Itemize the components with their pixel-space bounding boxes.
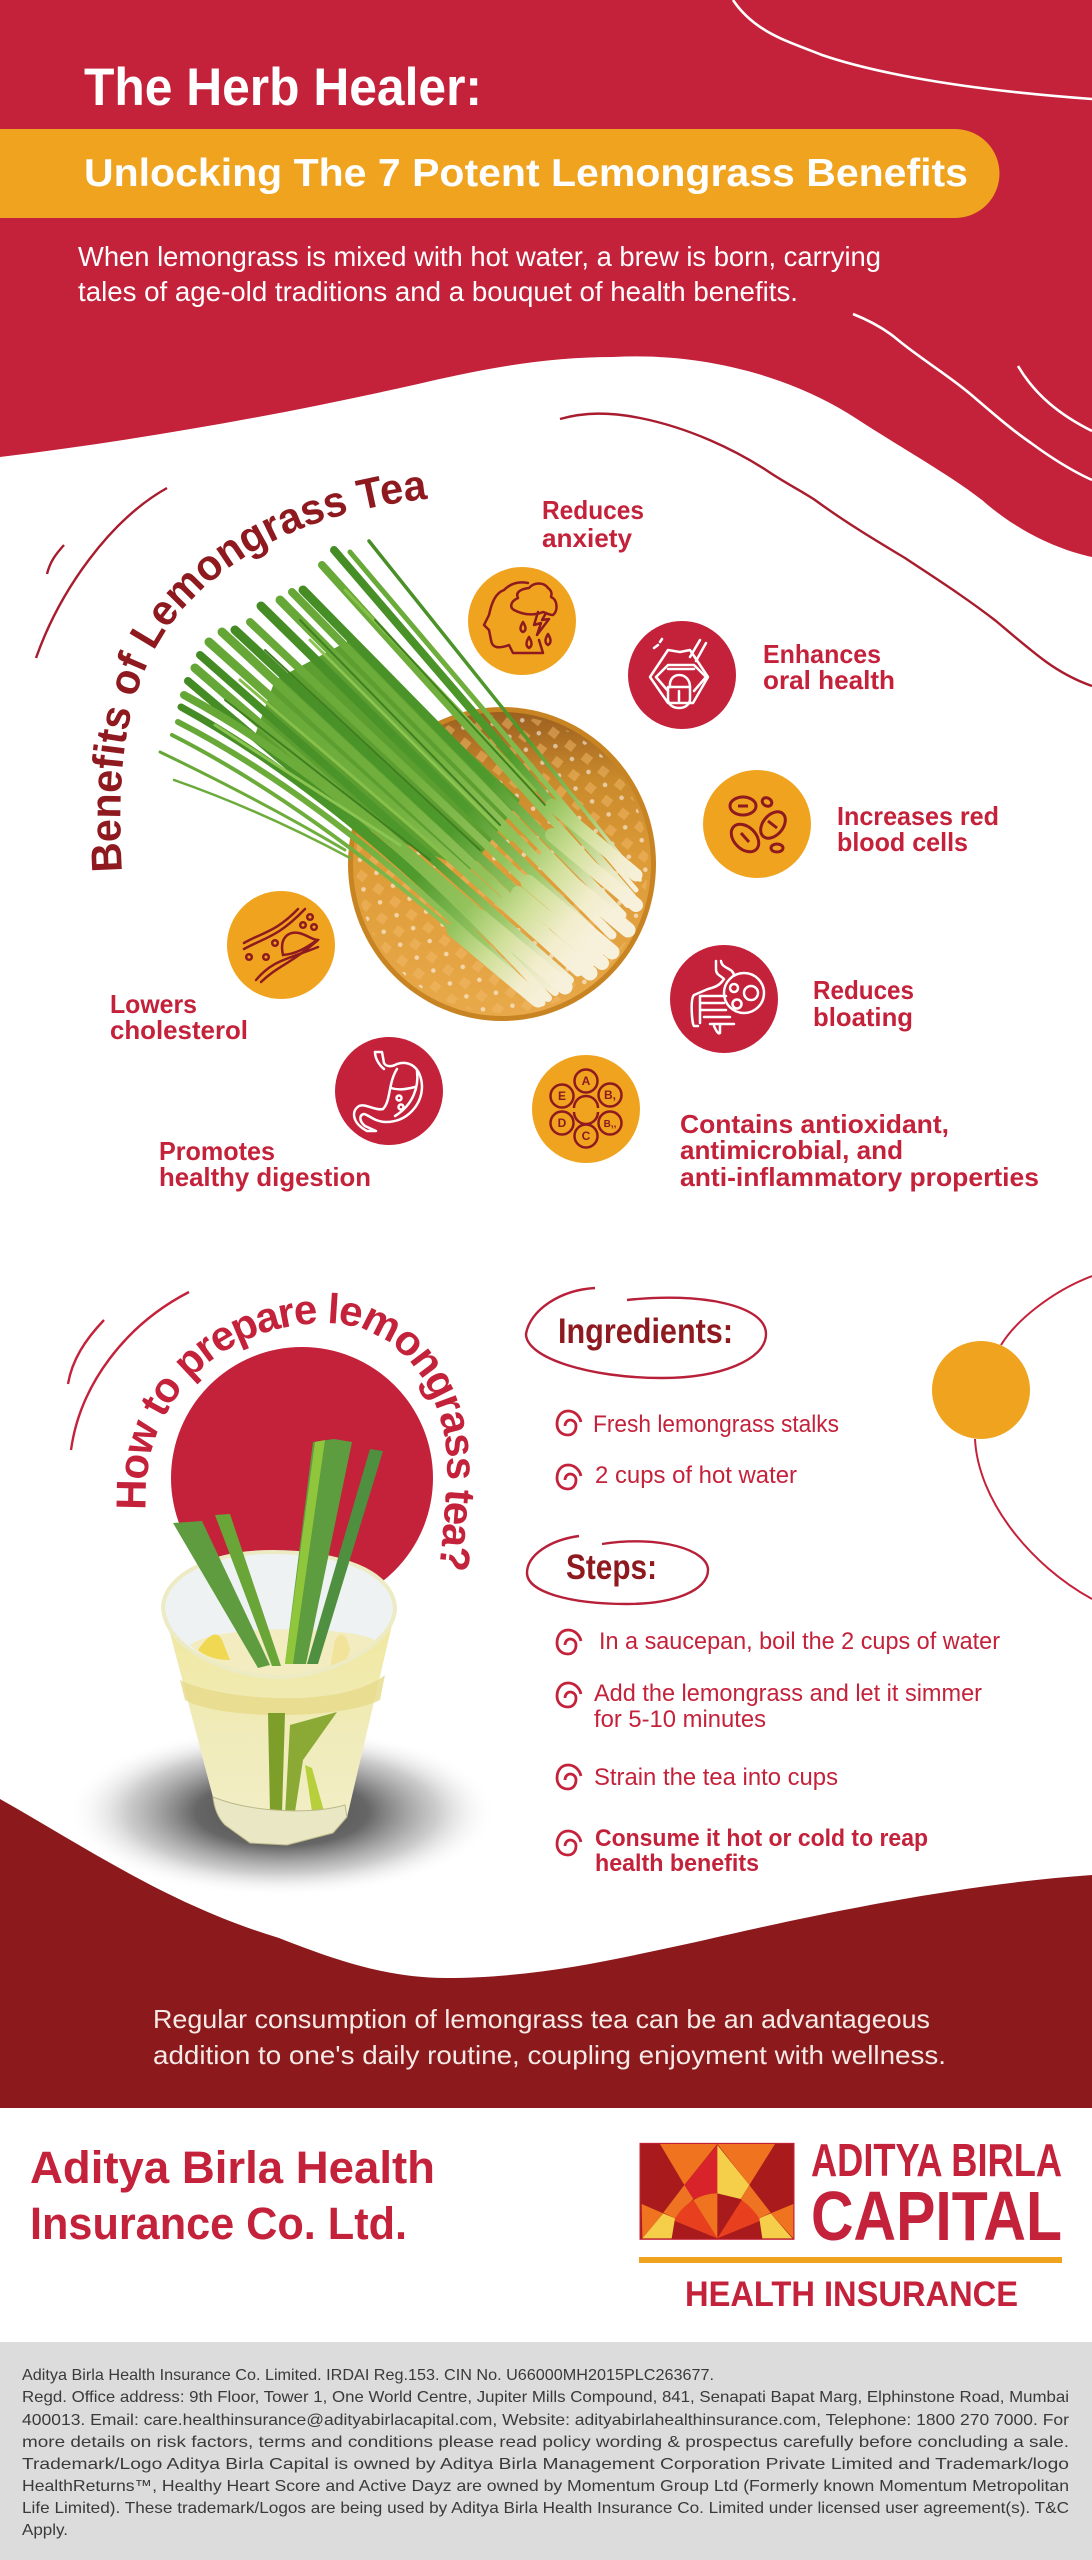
steps text: Steps:: [566, 1548, 657, 1587]
banner text: Unlocking The 7 Potent Lemongrass Benefits: [84, 152, 968, 195]
step 4: Consume it hot or cold to reap: [595, 1825, 928, 1852]
step 4: [557, 1825, 928, 1877]
step 2: for 5-10 minutes: [594, 1706, 766, 1733]
label: promotes healthy digestion: [159, 1136, 371, 1192]
label: antioxidant properties: Contains antioxidant,: [680, 1109, 949, 1139]
disclaimer panel: [0, 2342, 1092, 2560]
company name: Insurance Co. Ltd.: [30, 2198, 407, 2249]
stem fork: [285, 1712, 337, 1815]
fine stalk accents: [345, 590, 535, 790]
label: antioxidant properties: [680, 1109, 1039, 1192]
label: promotes healthy digestion: healthy digestion: [159, 1162, 371, 1192]
closing statement: [153, 2004, 946, 2070]
bright stem: [305, 1765, 325, 1818]
intro paragraph: When lemongrass is mixed with hot water, a brew is born, carrying: [78, 241, 881, 272]
dark red bottom wave: [0, 1799, 1092, 2108]
decorative circle line behind orange dot: [975, 1276, 1092, 1599]
ingredients text: Ingredients:: [558, 1312, 733, 1351]
ingredient: hot water: 2 cups of hot water: [595, 1462, 797, 1489]
company name: [30, 2142, 435, 2249]
section heading: Benefits of Lemongrass Tea: Benefits of Lemongrass Tea: [92, 476, 428, 870]
icon: cholesterol: [227, 891, 335, 999]
red circle behind glass: [171, 1347, 433, 1609]
disclaimer text: Trademark/Logo Aditya Birla Capital is owned by Aditya Birla Management Corporation Private Limited and Trademark/logo: [22, 2456, 1069, 2473]
decorative header line: far right: [1018, 366, 1092, 431]
disclaimer text: Aditya Birla Health Insurance Co. Limited. IRDAI Reg.153. CIN No. U66000MH2015PLC263677.: [22, 2367, 714, 2384]
label: increases red blood cells: blood cells: [837, 827, 968, 857]
intro paragraph: tales of age-old traditions and a bouquet of health benefits.: [78, 276, 798, 307]
label: lowers cholesterol: cholesterol: [110, 1015, 248, 1045]
label: enhances oral health: [763, 639, 895, 695]
disclaimer text: Regd. Office address: 9th Floor, Tower 1, One World Centre, Jupiter Mills Compound, 841, Senapati Bapat Marg, Elphinstone Road, Mumbai: [22, 2389, 1069, 2406]
icon: anxiety: [468, 567, 576, 675]
label: reduces anxiety: anxiety: [542, 523, 633, 553]
step 2: Add the lemongrass and let it simmer: [594, 1680, 982, 1707]
hand-drawn oval: [526, 1288, 766, 1378]
logo divider: [639, 2257, 1062, 2263]
step 3: Strain the tea into cups: [594, 1764, 838, 1791]
logo: [639, 2134, 1062, 2314]
icon: digestion: [335, 1037, 443, 1145]
header red wave background: [0, 0, 1092, 557]
icon: vitamins: B,: [604, 1088, 616, 1102]
label: lowers cholesterol: Lowers: [110, 989, 197, 1019]
stalk highlight: [285, 1440, 325, 1664]
glass foot: [213, 1797, 347, 1845]
intro paragraph: [78, 241, 881, 307]
petal flecks: [198, 1634, 230, 1660]
disclaimer text: [22, 2367, 1070, 2539]
decorative header line: top right: [733, 0, 1092, 99]
step 4: health benefits: [595, 1850, 759, 1877]
label: lowers cholesterol: [110, 989, 248, 1045]
closing statement: Regular consumption of lemongrass tea can be an advantageous: [153, 2004, 930, 2034]
icon: vitamins: D: [558, 1116, 567, 1130]
decorative thin line right of benefits: [560, 414, 1092, 686]
label: reduces anxiety: Reduces: [542, 495, 644, 525]
disclaimer text: 400013. Email: care.healthinsurance@adityabirlacapital.com, Website: adityabirlahealthinsurance.com, Telephone: 1800 270 7000. For: [22, 2412, 1070, 2429]
stalk right: [307, 1449, 383, 1664]
stalk left: [173, 1521, 270, 1668]
section heading: how to prepare: How to prepare lemongrass tea?: [116, 1292, 474, 1570]
ingredient: lemongrass stalks: Fresh lemongrass stalks: [593, 1411, 839, 1438]
hand-drawn oval: [527, 1536, 708, 1604]
label: antioxidant properties: anti-inflammatory properties: [680, 1162, 1039, 1192]
label: enhances oral health: Enhances: [763, 639, 881, 669]
label: reduces anxiety: [542, 495, 644, 553]
closing statement: addition to one's daily routine, coupling enjoyment with wellness.: [153, 2040, 946, 2070]
step 2: [557, 1680, 982, 1733]
icon: vitamins: [532, 1055, 640, 1163]
orange dot: [932, 1341, 1030, 1439]
step 1: In a saucepan, boil the 2 cups of water: [599, 1628, 1000, 1655]
tea surface inside glass: [190, 1629, 375, 1677]
icon: oral health: [628, 621, 736, 729]
label: promotes healthy digestion: Promotes: [159, 1136, 275, 1166]
pale stalk bases: [552, 805, 636, 875]
logo mark: [640, 2143, 794, 2239]
icon: vitamins: A: [582, 1074, 591, 1088]
glass shadow: [67, 1727, 497, 1897]
label: reduces bloating: bloating: [813, 1002, 913, 1032]
disclaimer text: more details on risk factors, terms and conditions please read policy wording & prospectus carefully before concluding a sale.: [22, 2434, 1069, 2451]
disclaimer text: Apply.: [22, 2522, 68, 2539]
steps heading: [527, 1536, 708, 1604]
logo descriptor: HEALTH INSURANCE: [685, 2275, 1018, 2314]
label: antioxidant properties: antimicrobial, and: [680, 1135, 903, 1165]
label: reduces bloating: Reduces: [813, 975, 914, 1005]
icon: vitamins: C: [582, 1129, 591, 1143]
disclaimer text: Life Limited). These trademark/Logos are being used by Aditya Birla Health Insurance Co. Limited under licensed user agreement(s). T&C: [22, 2500, 1069, 2517]
icon: bloating: [670, 945, 778, 1053]
tea body: [168, 1625, 392, 1845]
company name: Aditya Birla Health: [30, 2142, 435, 2193]
basket: [348, 707, 656, 1021]
subtitle banner: [0, 129, 1000, 218]
decorative arcs beside prepare heading: [68, 1292, 189, 1450]
stalk cluster: [285, 1439, 352, 1664]
banner pill: [0, 129, 1000, 218]
label: enhances oral health: oral health: [763, 665, 895, 695]
ingredients heading: [526, 1288, 766, 1378]
label: increases red blood cells: [837, 801, 999, 857]
label: increases red blood cells: Increases red: [837, 801, 999, 831]
decorative left arcs: [36, 488, 167, 658]
stems under water: [268, 1713, 285, 1813]
label: reduces bloating: [813, 975, 914, 1032]
bunch core: [255, 640, 520, 870]
icon: vitamins: E: [558, 1089, 566, 1103]
glass with lemongrass: [163, 1439, 395, 1845]
water band: [180, 1675, 385, 1715]
rim: [163, 1552, 395, 1677]
decorative header line: right middle: [853, 314, 1092, 480]
stalk second: [215, 1514, 281, 1666]
title: The Herb Healer:: [84, 58, 482, 117]
glass back: [163, 1552, 395, 1845]
lemongrass bunch: [160, 541, 640, 1003]
icon: red blood cells: [703, 770, 811, 878]
disclaimer text: HealthReturns™, Healthy Heart Score and Active Dayz are owned by Momentum Group Ltd (Formerly known Momentum Metropolitan: [22, 2478, 1069, 2495]
icon: vitamins: B,,: [604, 1119, 617, 1130]
logo wordmark: [811, 2134, 1062, 2255]
